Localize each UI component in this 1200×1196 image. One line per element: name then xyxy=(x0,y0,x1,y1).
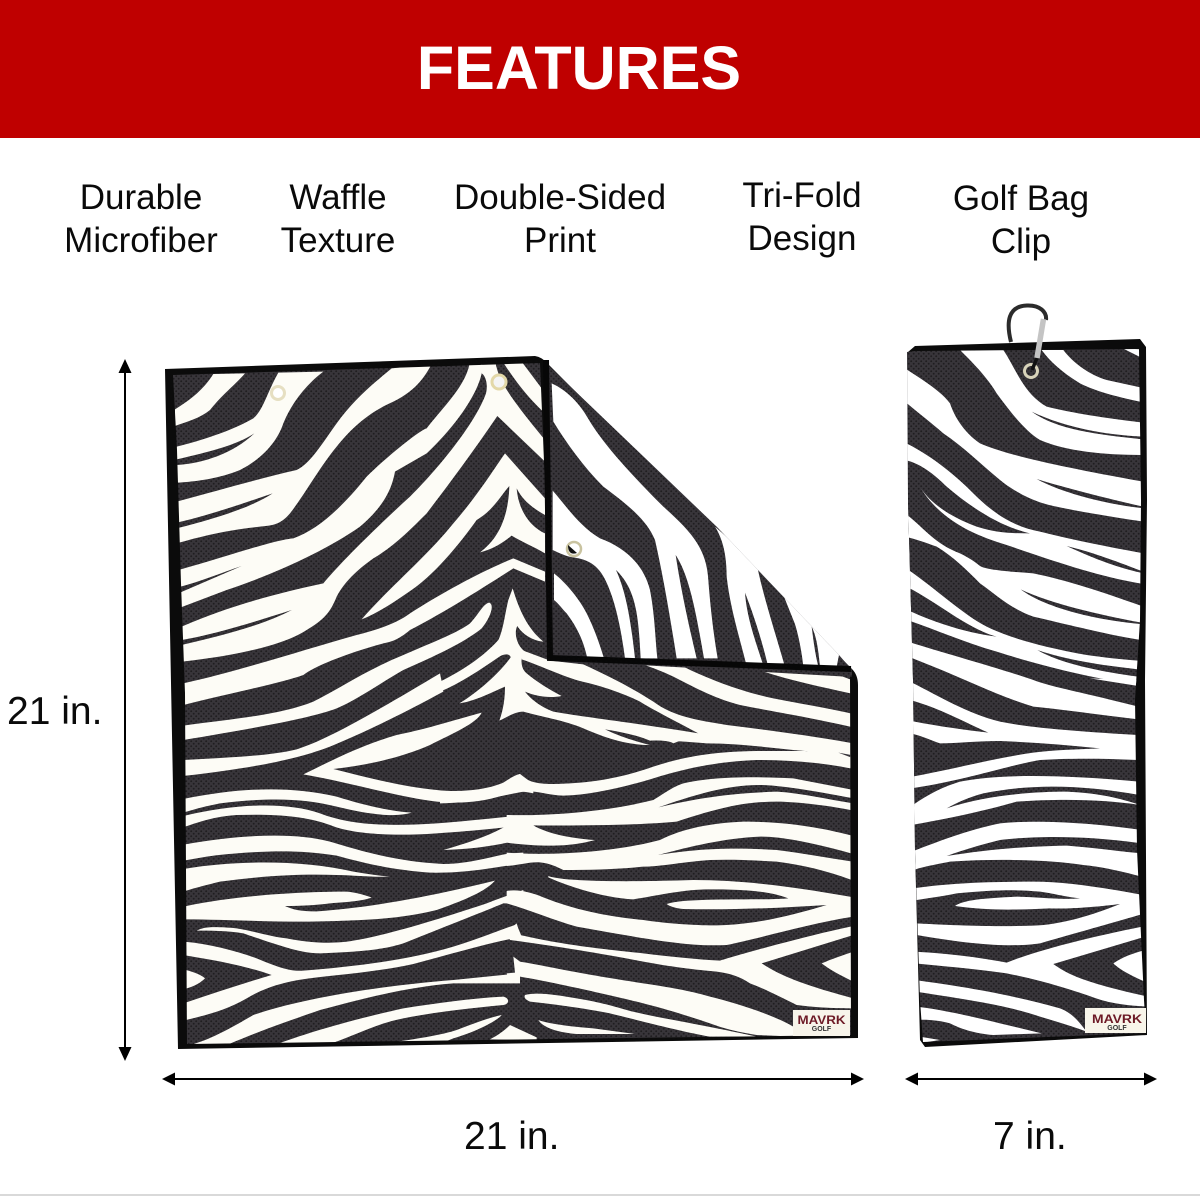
feature label: tri-fold design xyxy=(742,176,862,258)
feature label: durable microfiber: Microfiber xyxy=(64,221,218,260)
fold edge xyxy=(546,360,851,669)
towel fabric xyxy=(907,349,1146,1042)
grommet: top centre xyxy=(492,375,506,389)
feature label: waffle texture: Waffle xyxy=(289,178,387,217)
dimension: width: 21 in. xyxy=(464,1115,559,1158)
flap zebra stripes xyxy=(552,383,840,667)
brand label: tri-fold towel: MAVRK xyxy=(1092,1014,1143,1026)
feature label: tri-fold design: Design xyxy=(748,219,856,258)
flap fabric xyxy=(545,362,852,677)
dimension: height: 21 in. xyxy=(7,690,102,733)
feature label: durable microfiber: Durable xyxy=(80,178,202,217)
brand label: tri-fold towel: GOLF xyxy=(1107,1025,1127,1032)
feature label: golf bag clip: Golf Bag xyxy=(953,179,1089,218)
square towel xyxy=(165,356,858,1049)
feature label: golf bag clip: Clip xyxy=(991,222,1051,261)
feature label: durable microfiber xyxy=(64,178,218,260)
feature label: double-sided print: Print xyxy=(524,221,596,260)
feature label: golf bag clip xyxy=(953,179,1089,261)
brand label: square towel: GOLF xyxy=(812,1026,832,1033)
zebra stripes xyxy=(175,360,853,1045)
towel fabric xyxy=(173,363,851,1044)
feature label: double-sided print: Double-Sided xyxy=(454,178,666,217)
tri-fold towel xyxy=(905,305,1148,1047)
arrow: towel width xyxy=(162,1072,864,1086)
grommet: top left xyxy=(272,386,284,400)
grommet: flap xyxy=(567,542,581,556)
brand label: tri-fold towel xyxy=(1085,1008,1146,1033)
zebra stripes xyxy=(905,348,1148,1043)
arrow: folded width xyxy=(905,1072,1157,1086)
arrow: towel height xyxy=(118,359,132,1061)
brand label: square towel: MAVRK xyxy=(798,1015,846,1027)
brand label: square towel xyxy=(793,1010,850,1036)
title banner xyxy=(0,0,1200,138)
feature label: waffle texture xyxy=(281,178,395,260)
towel outline xyxy=(908,339,1147,1047)
feature label: tri-fold design: Tri-Fold xyxy=(742,176,862,215)
towel outline xyxy=(165,356,858,1049)
title banner: FEATURES xyxy=(417,34,741,102)
folded corner flap xyxy=(545,360,852,677)
dimension: folded width: 7 in. xyxy=(993,1115,1067,1158)
feature label: double-sided print xyxy=(454,178,666,260)
carabiner gate and grommet xyxy=(1024,319,1044,378)
page bottom edge xyxy=(0,1194,1200,1196)
carabiner arch xyxy=(1009,305,1046,342)
feature label: waffle texture: Texture xyxy=(281,221,395,260)
